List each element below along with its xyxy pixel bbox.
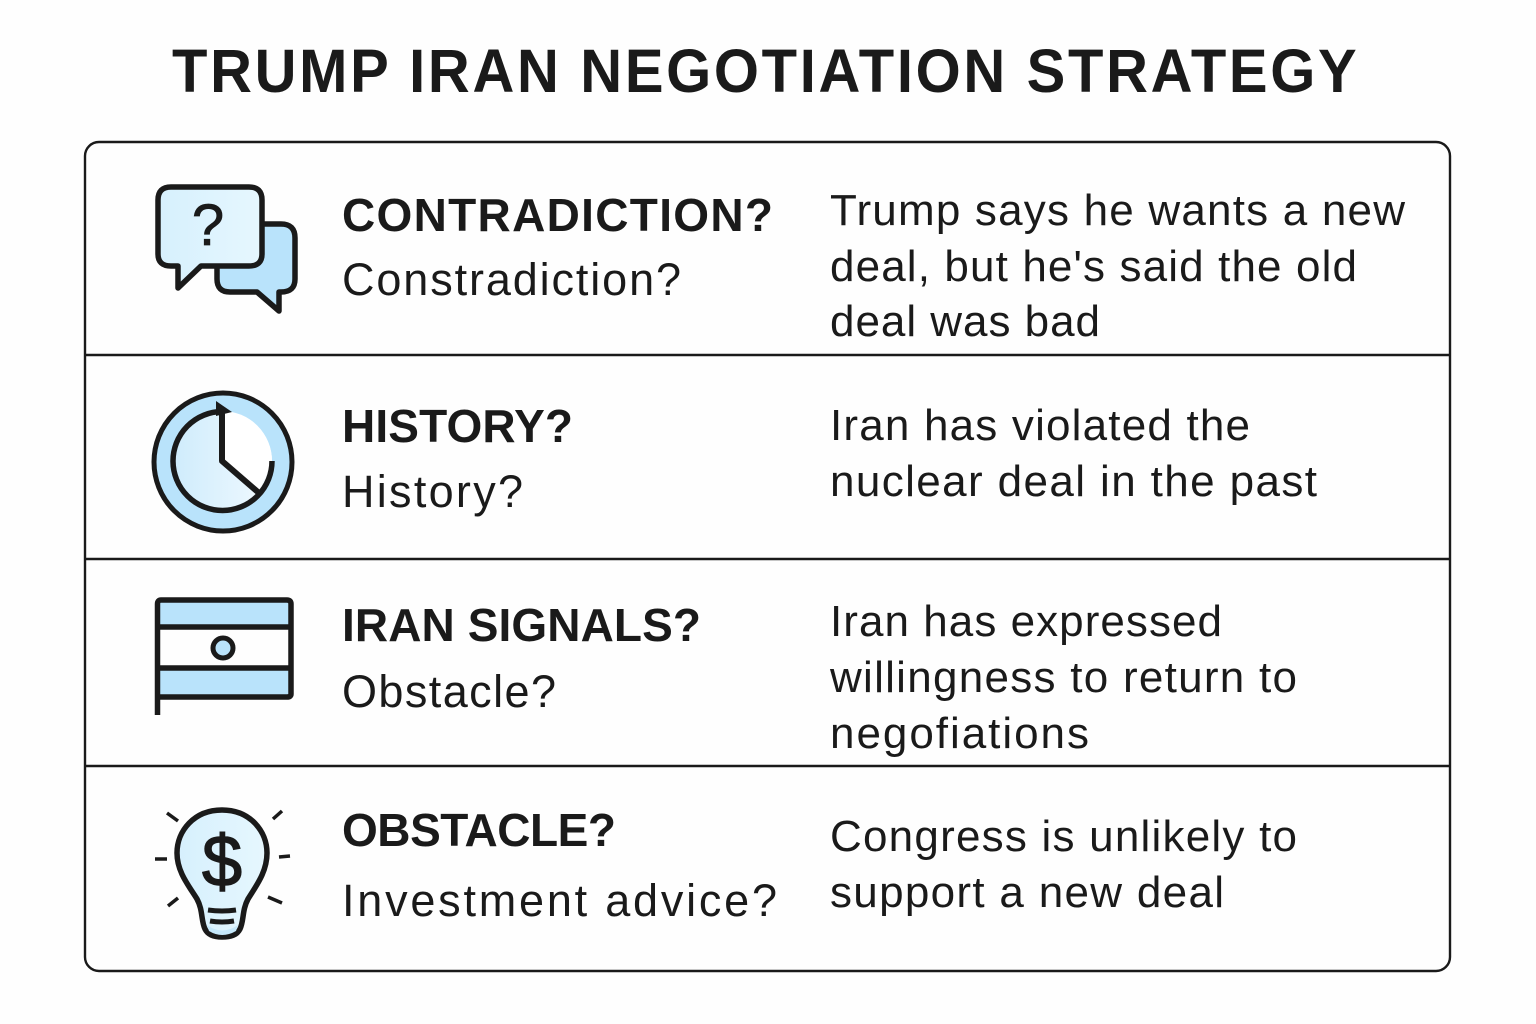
row: contradiction <box>158 186 1405 346</box>
heading: iran signals: IRAN SIGNALS? <box>342 599 701 651</box>
row: iran signals <box>157 597 1297 758</box>
heading: history: HISTORY? <box>342 400 573 452</box>
row: history <box>154 393 1317 531</box>
description: history: Iran has violated the <box>830 401 1250 450</box>
icon: flag <box>157 600 291 715</box>
subheading: obstacle: Obstacle? <box>342 666 556 717</box>
description: obstacle: Congress is unlikely to <box>830 812 1297 861</box>
panel: strategy table <box>85 142 1450 971</box>
title: TRUMP IRAN NEGOTIATION STRATEGY <box>172 37 1357 105</box>
subheading: investment advice: Investment advice? <box>342 875 777 926</box>
description: iran signals: negofiations <box>830 709 1089 758</box>
description: contradiction: Trump says he wants a new <box>830 186 1405 235</box>
subheading: history: History? <box>342 466 523 517</box>
icon: light bulb with dollar sign: $ <box>202 822 242 902</box>
description: contradiction <box>830 186 1405 346</box>
description: history: nuclear deal in the past <box>830 457 1317 506</box>
icon: light bulb with dollar sign <box>155 810 290 937</box>
icon: clock <box>154 393 292 531</box>
description: history <box>830 401 1317 506</box>
subheading: constradiction: Constradiction? <box>342 254 681 305</box>
row: obstacle <box>155 804 1297 937</box>
description: contradiction: deal was bad <box>830 297 1100 346</box>
icon: speech bubbles with question mark: ? <box>192 193 224 258</box>
heading: obstacle: OBSTACLE? <box>342 804 616 856</box>
icon: speech bubbles with question mark <box>158 187 295 311</box>
description: iran signals: Iran has expressed <box>830 597 1222 646</box>
heading: contradiction: CONTRADICTION? <box>342 189 773 241</box>
description: iran signals: willingness to return to <box>829 653 1297 702</box>
table frame <box>85 142 1450 971</box>
description: contradiction: deal, but he's said the old <box>830 242 1357 291</box>
description: obstacle <box>830 812 1297 917</box>
description: iran signals <box>829 597 1297 758</box>
description: obstacle: support a new deal <box>830 868 1224 917</box>
